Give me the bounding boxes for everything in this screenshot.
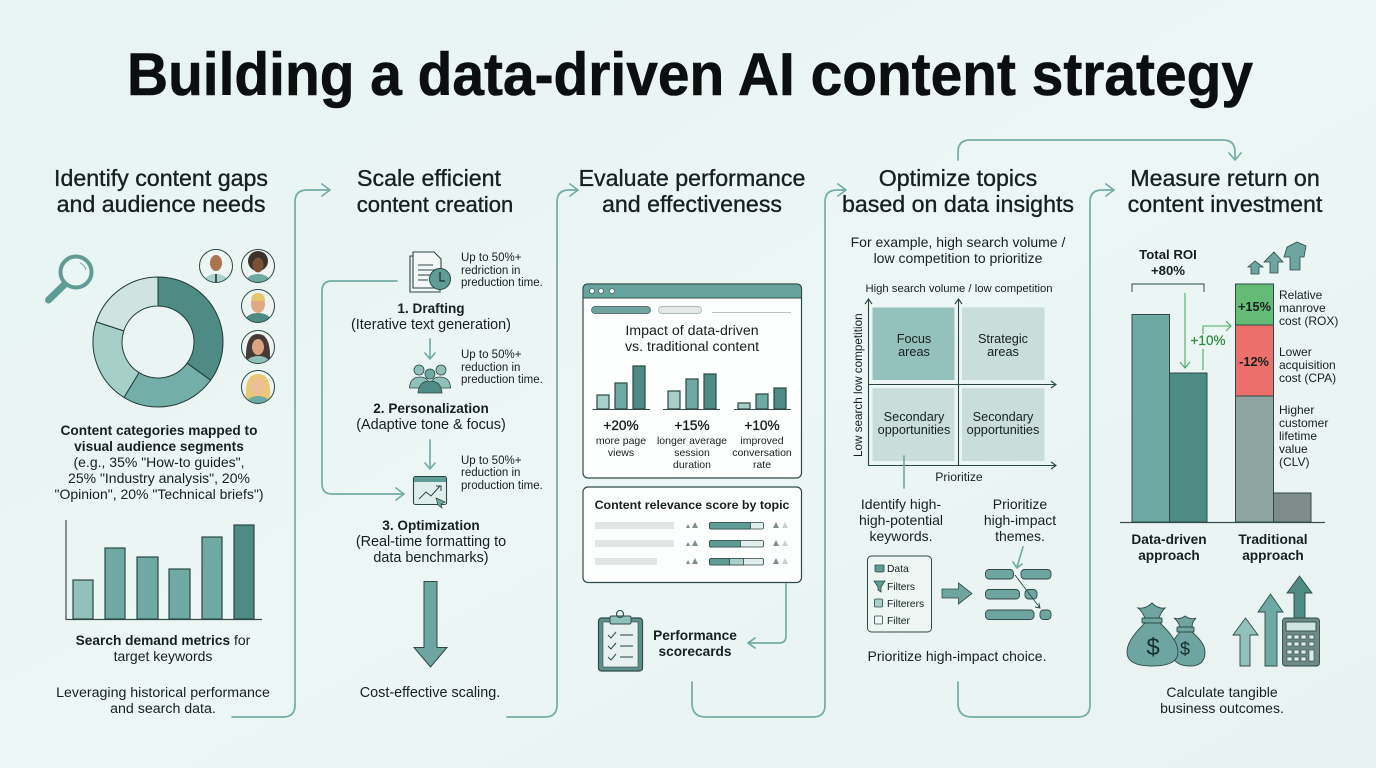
text: focus areas: Focus xyxy=(897,332,931,346)
text: drafting: (Iterative text generation) xyxy=(351,317,511,333)
heading: identify content gaps: and audience needs xyxy=(57,191,265,217)
text: optimization note: production time. xyxy=(461,480,543,492)
panel: filters: Filter xyxy=(887,616,910,627)
text: matrix side label: Low search low competition xyxy=(852,313,865,457)
bar chart: search demand xyxy=(66,520,262,620)
text: prioritize choice: Prioritize high-impact choice. xyxy=(868,648,1046,664)
heading: evaluate performance: and effectiveness xyxy=(602,191,782,217)
text: content categories: (e.g., 35% "How-to guides", xyxy=(73,454,245,470)
arrow: step 1 to step 2 xyxy=(232,184,330,717)
text: search demand caption: Search demand metrics for xyxy=(76,632,250,648)
text: higher lifetime value: (CLV) xyxy=(1279,455,1309,469)
icon: money bags: $ xyxy=(1180,639,1190,659)
text: prioritize themes: Prioritize xyxy=(993,496,1047,512)
label: +15%: +15% xyxy=(1238,299,1272,314)
metric: improved conversation rate: improved xyxy=(740,435,784,447)
text: data-driven approach: Data-driven xyxy=(1131,532,1207,547)
icon: audience avatar 4 xyxy=(242,330,274,366)
arrow: step 3 to step 4 xyxy=(692,184,846,717)
text: optimization: (Real-time formatting to xyxy=(356,534,506,550)
icon: audience avatar 5 xyxy=(242,370,274,406)
metric: longer session: session xyxy=(674,447,710,459)
icon: clipboard checklist xyxy=(598,610,642,671)
bracket: total ROI xyxy=(1132,284,1204,292)
text: optimization note: Up to 50%+ xyxy=(461,455,521,467)
icon: audience avatar 3 xyxy=(242,290,274,325)
arrow: drafting to personalization xyxy=(425,339,435,359)
text: personalization note: Up to 50%+ xyxy=(461,349,521,361)
text: search demand caption: target keywords xyxy=(114,648,212,664)
text: secondary opportunities left: Secondary xyxy=(884,410,944,424)
text: focus areas: areas xyxy=(898,345,930,359)
heading: identify content gaps: Identify content gaps xyxy=(54,165,268,191)
title: Building a data-driven AI content strategy xyxy=(127,41,1254,108)
card: impact of data-driven content xyxy=(583,284,802,478)
arrow: optimization loop xyxy=(322,281,404,500)
text: prioritize themes: themes. xyxy=(995,528,1045,544)
text: calculate outcomes: business outcomes. xyxy=(1160,700,1284,716)
text: higher lifetime value: Higher xyxy=(1279,403,1314,417)
text: total ROI: +80% xyxy=(1151,263,1185,278)
text: secondary opportunities right: opportunities xyxy=(967,423,1039,437)
label: -12%: -12% xyxy=(1239,354,1270,369)
label: +10%: +10% xyxy=(1191,333,1225,348)
text: lower acquisition cost: acquisition xyxy=(1279,358,1336,372)
donut chart: content categories xyxy=(93,277,223,407)
icon: rising arrows and calculator xyxy=(1233,576,1320,666)
panel: filters xyxy=(868,556,932,632)
panel: identify content gaps xyxy=(48,165,274,717)
heading: measure return: content investment xyxy=(1128,191,1323,217)
text: relative cost: cost (ROX) xyxy=(1279,314,1338,328)
arrow: top link from step 4 to step 5 xyxy=(958,140,1241,160)
text: strategic areas: areas xyxy=(987,345,1019,359)
icon: browser chart xyxy=(414,476,446,508)
text: total ROI: Total ROI xyxy=(1139,247,1197,262)
metric: longer session: duration xyxy=(673,459,711,471)
bar chart: conversation rate xyxy=(734,388,791,410)
text: optimization: data benchmarks) xyxy=(373,550,489,566)
arrow: relevance to scorecards xyxy=(748,584,786,648)
text: impact heading: Impact of data-driven xyxy=(625,323,759,339)
text: performance scorecards: Performance xyxy=(653,628,737,643)
text: secondary opportunities right: Secondary xyxy=(973,410,1033,424)
text: relative cost: manrove xyxy=(1279,301,1326,315)
text: traditional approach: approach xyxy=(1242,548,1304,563)
text: identify keywords: Identify high- xyxy=(861,496,941,512)
heading: optimize topics: based on data insights xyxy=(842,191,1074,217)
text: matrix bottom label: Prioritize xyxy=(935,470,983,484)
text: optimization note: reduction in xyxy=(461,467,520,479)
text: higher lifetime value: lifetime xyxy=(1279,429,1317,443)
chart: priority matrix xyxy=(865,299,1056,469)
metric: more page views: more page xyxy=(596,435,646,447)
heading: optimize topics: Optimize topics xyxy=(879,165,1037,191)
metric: improved conversation rate: +10% xyxy=(744,418,780,433)
text: content categories: 25% "Industry analysis", 20% xyxy=(68,470,250,486)
bar chart: page views xyxy=(592,366,650,410)
text: personalization: (Adaptive tone & focus) xyxy=(356,417,506,433)
arrow: personalization to optimization xyxy=(425,440,435,469)
text: drafting note: Up to 50%+ xyxy=(461,252,521,264)
text: cost-effective scaling: Cost-effective scaling. xyxy=(360,685,500,701)
heading: scale efficient content creation: Scale efficient xyxy=(357,165,501,191)
panel: measure return xyxy=(1120,165,1338,716)
panel: filters: Filters xyxy=(887,582,915,593)
metric: longer session: +15% xyxy=(674,418,710,433)
icon: document with clock xyxy=(410,252,450,292)
text: performance scorecards: scorecards xyxy=(658,644,732,659)
text: strategic areas: Strategic xyxy=(978,332,1028,346)
arrow: down to cost-effective scaling xyxy=(414,582,447,667)
metric: more page views: +20% xyxy=(603,418,639,433)
text: matrix top label: High search volume / low competition xyxy=(865,283,1053,295)
text: personalization note: preduction time. xyxy=(461,374,543,386)
text: relative cost: Relative xyxy=(1279,288,1322,302)
heading: measure return: Measure return on xyxy=(1130,165,1320,191)
text: example: For example, high search volume / xyxy=(851,234,1065,250)
text: content categories: Content categories mapped to xyxy=(61,423,257,438)
text: lower acquisition cost: Lower xyxy=(1279,345,1312,359)
text: identify keywords: keywords. xyxy=(869,528,933,544)
text: drafting: 1. Drafting xyxy=(397,301,465,316)
arrow: filters to themes xyxy=(942,583,972,604)
text: calculate outcomes: Calculate tangible xyxy=(1166,684,1278,700)
text: personalization: 2. Personalization xyxy=(373,401,489,416)
connector: matrix to keywords xyxy=(903,456,905,488)
panel: evaluate performance xyxy=(579,165,805,671)
metric: longer session: longer average xyxy=(657,435,727,447)
panel: scale content creation xyxy=(322,165,543,701)
text: higher lifetime value: customer xyxy=(1279,416,1328,430)
icon: small growth arrows xyxy=(1248,242,1306,274)
heading: scale efficient content creation: content creation xyxy=(357,192,513,217)
text: relevance heading: Content relevance score by topic xyxy=(595,498,790,512)
text: content categories: "Opinion", 20% "Technical briefs") xyxy=(55,486,263,502)
text: prioritize themes: high-impact xyxy=(984,512,1056,528)
metric: improved conversation rate: conversation xyxy=(732,447,792,459)
text: drafting note: redriction in xyxy=(461,265,520,277)
icon: audience avatar 2 xyxy=(242,250,274,285)
icon: people group xyxy=(410,365,450,393)
metric: improved conversation rate: rate xyxy=(753,459,771,471)
chart: prioritized theme bars xyxy=(986,547,1051,620)
text: drafting note: preduction time. xyxy=(461,277,543,289)
text: content categories: visual audience segments xyxy=(74,439,244,454)
text: historical performance: and search data. xyxy=(110,701,216,717)
panel: optimize topics xyxy=(842,165,1074,664)
icon: audience avatar 1 xyxy=(200,250,232,285)
card: content relevance score xyxy=(583,487,802,582)
icon: money bags xyxy=(1127,603,1205,666)
text: secondary opportunities left: opportunities xyxy=(878,423,950,437)
text: traditional approach: Traditional xyxy=(1238,532,1308,547)
icon: magnifying glass xyxy=(48,256,92,300)
arrow: step 2 to step 3 xyxy=(507,184,578,717)
text: personalization note: reduction in xyxy=(461,362,520,374)
bar chart: ROI comparison xyxy=(1120,284,1325,522)
panel: filters: Data xyxy=(887,564,909,575)
text: higher lifetime value: value xyxy=(1279,442,1308,456)
text: optimization: 3. Optimization xyxy=(382,518,480,533)
rows: relevance bars xyxy=(595,522,788,565)
bar chart: session duration xyxy=(663,374,720,410)
text: example: low competition to prioritize xyxy=(874,250,1043,266)
text: lower acquisition cost: cost (CPA) xyxy=(1279,371,1336,385)
heading: evaluate performance: Evaluate performance xyxy=(579,165,805,191)
metric: more page views: views xyxy=(608,447,634,459)
text: historical performance: Leveraging historical performance xyxy=(56,685,270,701)
panel: filters: Filterers xyxy=(887,599,924,610)
text: identify keywords: high-potential xyxy=(859,512,943,528)
text: impact heading: vs. traditional content xyxy=(625,339,759,355)
arrow: step 4 to step 5 xyxy=(958,184,1114,717)
text: data-driven approach: approach xyxy=(1138,548,1200,563)
icon: money bags: $ xyxy=(1146,634,1160,661)
